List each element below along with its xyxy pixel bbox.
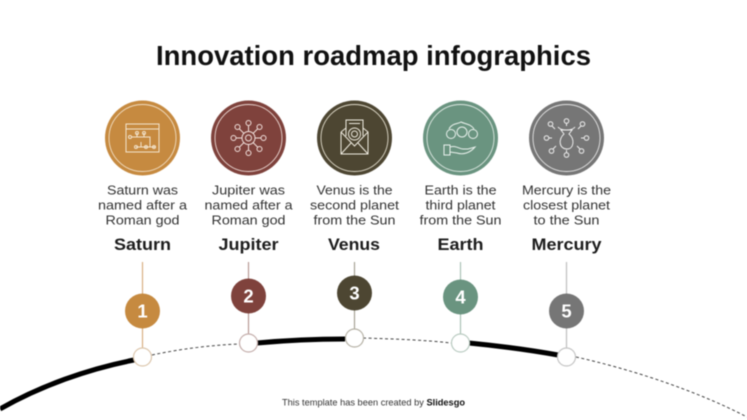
connector and marker 4 [443, 262, 478, 352]
description: Jupiter: Roman god [212, 212, 286, 228]
description: Saturn: Roman god [106, 212, 180, 228]
connector and marker 3 [337, 262, 372, 347]
connector and marker 1: 1 [137, 300, 148, 322]
connector and marker 3: 3 [349, 282, 360, 304]
heading: Earth: Earth [438, 235, 484, 254]
footer credit: This template has been created by Slidesgo [282, 398, 466, 408]
heading: Venus: Venus [328, 235, 380, 254]
description: Earth: from the Sun [420, 212, 502, 228]
description: Earth [420, 182, 502, 228]
connector and marker 1 [125, 262, 160, 366]
connector and marker 5 [549, 262, 584, 366]
panel: Jupiter [204, 100, 293, 352]
heading: Jupiter: Jupiter [218, 235, 279, 254]
description: Mercury: Mercury is the [522, 182, 611, 198]
description: Jupiter: named after a [204, 198, 293, 212]
icon: Mercury money bag network [529, 100, 604, 176]
title: Innovation roadmap infographics [156, 40, 591, 71]
panel: Earth [420, 100, 502, 352]
panel: Venus [310, 100, 399, 347]
description: Saturn [98, 182, 188, 228]
panel: Saturn [98, 100, 188, 366]
description: Jupiter: Jupiter was [212, 182, 286, 198]
description: Mercury: to the Sun [534, 212, 600, 228]
icon: Saturn roadmap window [105, 100, 180, 176]
icon: Earth hand with coins [423, 100, 498, 176]
heading: Mercury: Mercury [532, 235, 602, 254]
description: Saturn: Saturn was [107, 182, 179, 198]
description: Earth: third planet [426, 198, 496, 212]
roadmap curve [0, 338, 747, 417]
description: Venus: Venus is the [316, 182, 392, 198]
description: Saturn: named after a [98, 198, 188, 212]
description: Mercury [522, 182, 611, 228]
description: Jupiter [204, 182, 293, 228]
description: Venus: from the Sun [314, 212, 396, 228]
description: Mercury: closest planet [523, 198, 610, 212]
connector and marker 2: 2 [243, 286, 254, 306]
heading: Saturn: Saturn [114, 235, 171, 254]
description: Earth: Earth is the [424, 182, 496, 198]
connector and marker 2 [231, 262, 266, 352]
panel: Mercury [522, 100, 611, 366]
description: Venus: second planet [310, 198, 399, 212]
icon: Jupiter network [211, 100, 286, 176]
connector and marker 4: 4 [455, 286, 466, 308]
connector and marker 5: 5 [561, 300, 572, 322]
description: Venus [310, 182, 399, 228]
icon: Venus envelope [317, 100, 392, 176]
